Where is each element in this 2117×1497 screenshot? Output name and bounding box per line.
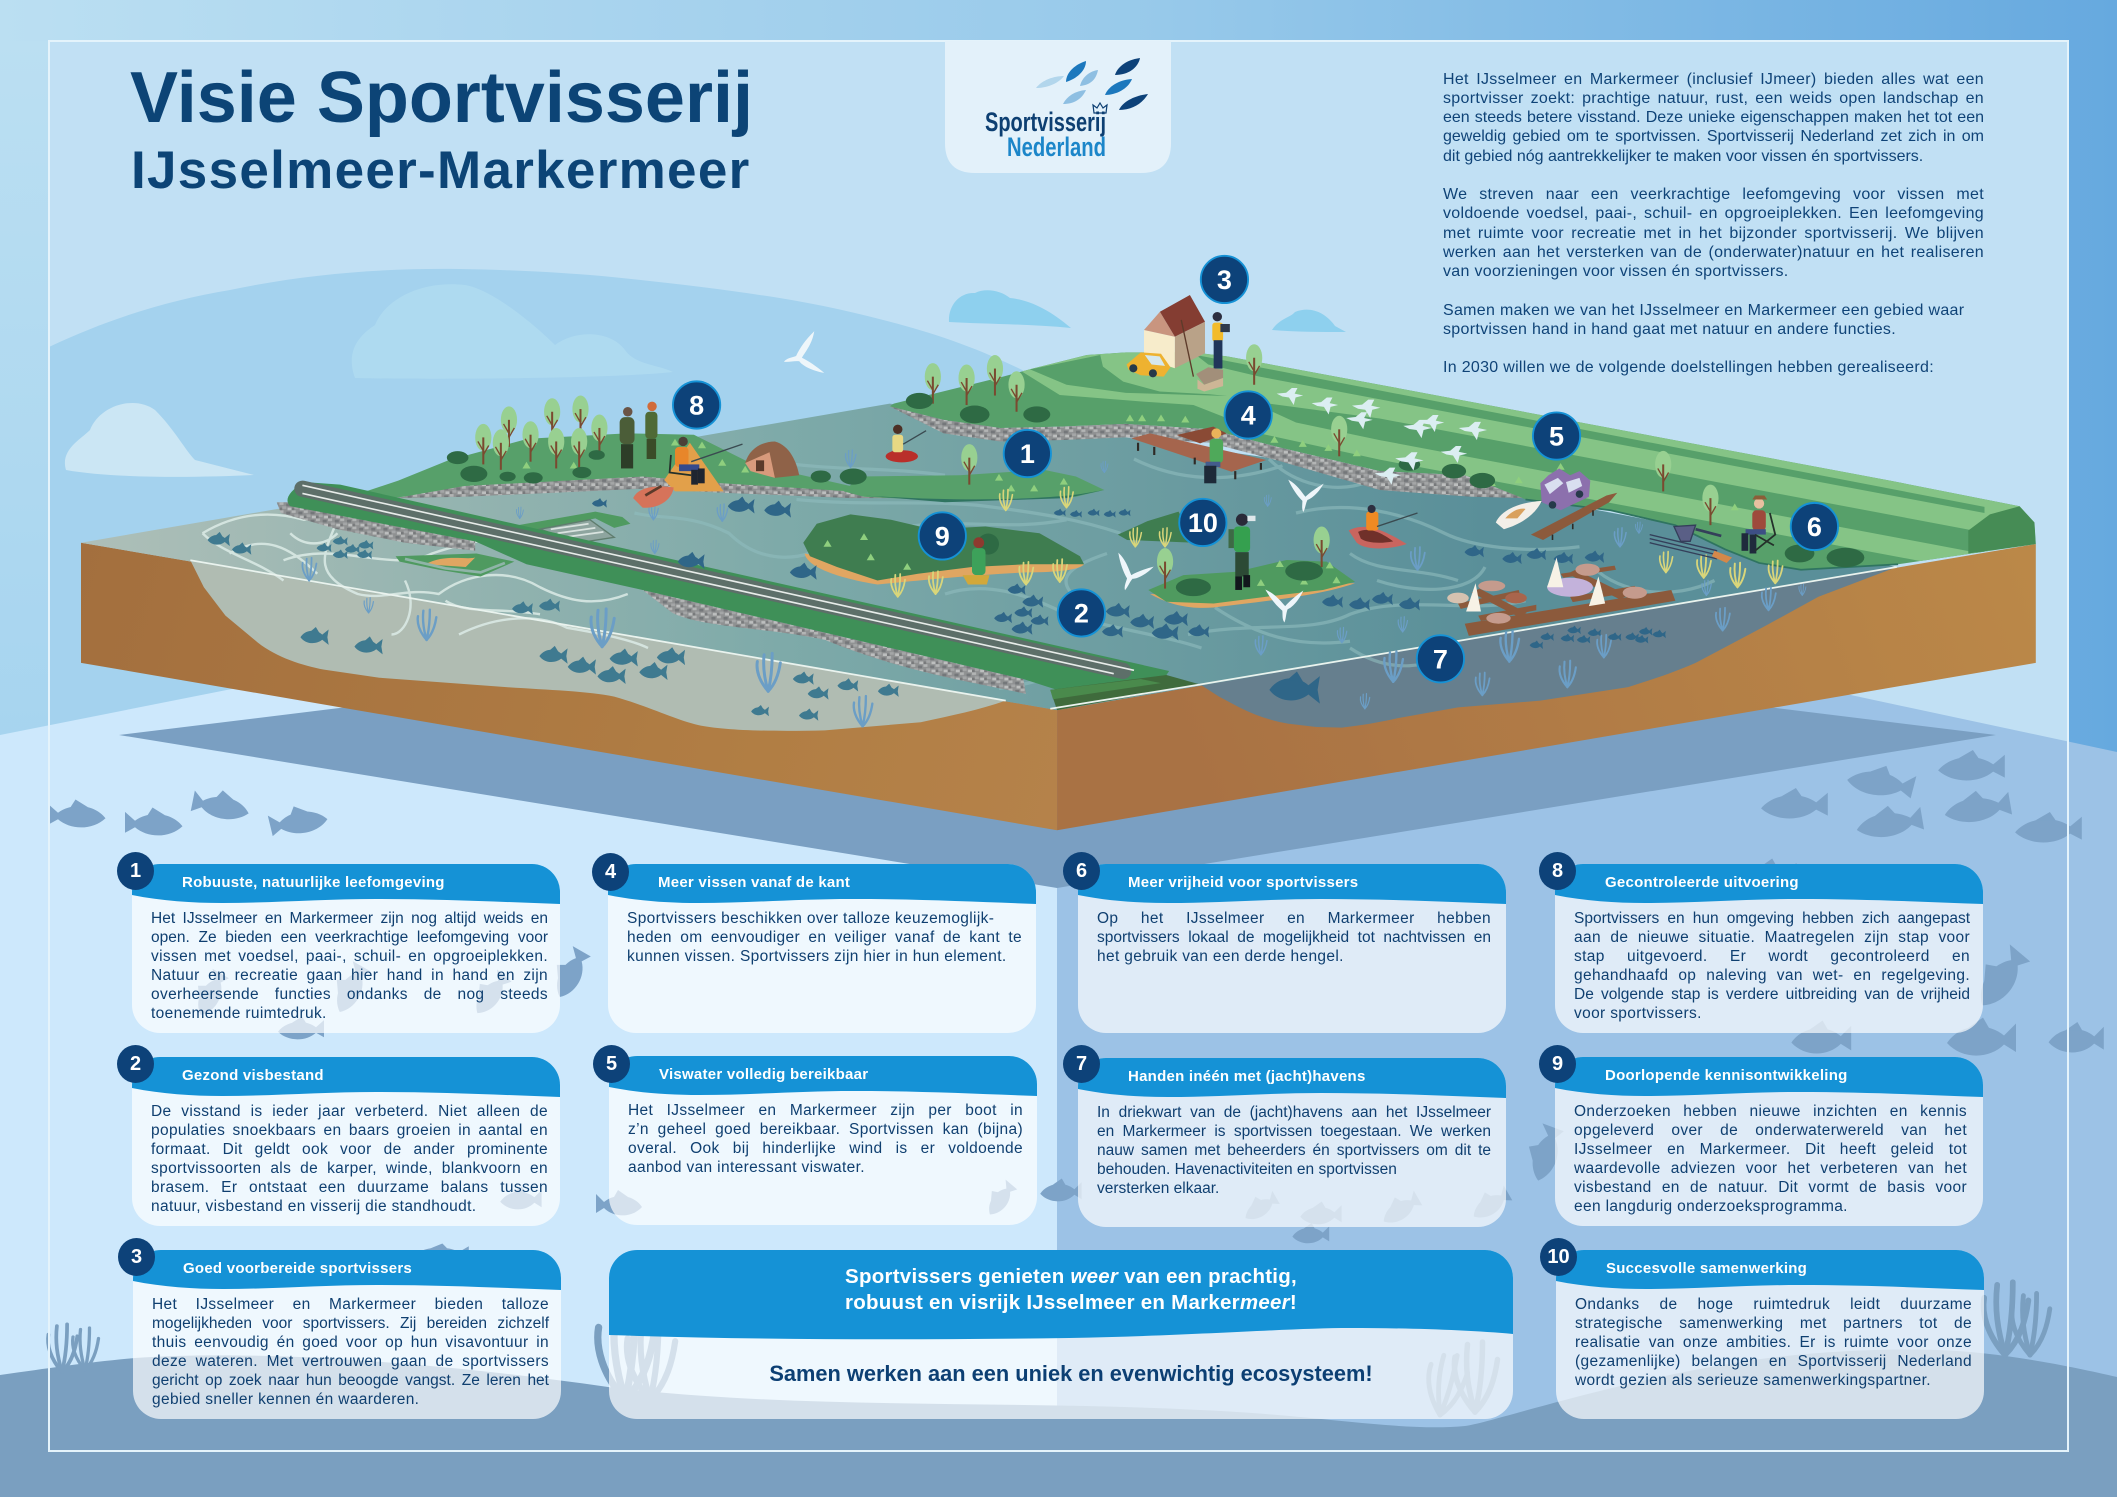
rocks along dike xyxy=(277,502,1026,694)
logo panel: Sportvisserij xyxy=(985,107,1106,137)
seabed hills xyxy=(0,1350,2117,1497)
island back small xyxy=(1118,512,1195,543)
panel: goal 1: open. Ze bieden een veerkrachtige leefomgeving voor xyxy=(151,928,548,946)
panel: goal 9: een langdurig onderzoeksprogramma. xyxy=(1574,1198,1848,1214)
harbour model right of dike xyxy=(518,512,630,543)
land with tent and fishers xyxy=(362,433,919,498)
dike with road xyxy=(287,482,1200,710)
yellow car xyxy=(1127,352,1170,377)
panel: goal 7: versterken elkaar. xyxy=(1097,1180,1219,1196)
harbour model left of dike xyxy=(396,554,514,576)
panel: goal 2 xyxy=(117,1045,560,1226)
panel: goal 1 xyxy=(117,852,560,1033)
fish behind cards xyxy=(186,858,2104,1261)
white boat xyxy=(1496,501,1542,529)
panel: goal 1: Natuur en recreatie gaan hier hand in hand en zijn xyxy=(151,966,548,984)
fish school: lower right xyxy=(1761,750,2082,842)
house with roof xyxy=(1144,295,1205,377)
marker 9 xyxy=(919,512,966,560)
panel: goal 2: sportvissoorten als de karper, winde, blankvoorn en xyxy=(151,1160,548,1176)
intro text: werken aan het versterken van de (onderwater)natuur en het realiseren xyxy=(1443,244,1984,261)
marker 6 xyxy=(1791,503,1838,550)
panel: goal 4: Sportvissers beschikken over talloze keuzemoglijk- xyxy=(627,910,994,926)
panel: goal 1: 1 xyxy=(130,860,141,882)
hut xyxy=(1196,367,1223,392)
panel: goal 6: sportvissers lokaal de mogelijkheid tot nachtvissen en xyxy=(1097,928,1491,946)
marker 4 xyxy=(1225,391,1272,439)
number markers xyxy=(673,256,1838,682)
water cross-section right xyxy=(1200,567,1897,728)
panel: goal 5: Het IJsselmeer en Markermeer zijn per boot in xyxy=(628,1102,1023,1118)
white edge line xyxy=(190,560,1897,709)
panel: goal 6: Meer vrijheid voor sportvissers xyxy=(1128,874,1358,891)
panel: goal 7: behouden. Havenactiviteiten en sportvissen xyxy=(1097,1160,1397,1178)
panel: goal 10: Succesvolle samenwerking xyxy=(1606,1260,1807,1277)
panel: goal 3: 3 xyxy=(131,1246,142,1268)
panel: goal 5: overal. Ook bij hinderlijke wind is er voldoende xyxy=(628,1140,1023,1156)
panel: goal 1: Het IJsselmeer en Markermeer zijn nog altijd weids en xyxy=(151,910,548,926)
reeds xyxy=(891,487,1783,597)
seaweed: bottom xyxy=(48,1282,2050,1418)
water plants xyxy=(302,450,1806,726)
island 10 xyxy=(1148,560,1355,608)
panel: goal 4 xyxy=(592,853,1036,1033)
marina docks with boats xyxy=(1447,558,1675,636)
marker 8: 8 xyxy=(689,390,704,420)
marker 1: 1 xyxy=(1020,439,1035,469)
intro text: sportvisser zoekt: prachtige natuur, rust, een weids open landschap en xyxy=(1443,90,1984,107)
panel: goal 10 xyxy=(1540,1238,1984,1419)
panel: goal 2: De visstand is ieder jaar verbeterd. Niet alleen de xyxy=(151,1102,548,1120)
marker 8 xyxy=(673,381,720,429)
panel: goal 7: Handen inéén met (jacht)havens xyxy=(1128,1068,1366,1085)
panel: goal 5: aanbod van interessant viswater. xyxy=(628,1158,865,1176)
far hill land xyxy=(890,352,2036,570)
panel: goal 3: Goed voorbereide sportvissers xyxy=(183,1260,412,1277)
panel: goal 7: en Markermeer is sportvissen toegestaan. We werken xyxy=(1097,1122,1491,1140)
panel: goal 4: heden om eenvoudiger en veiliger vanaf de kant te xyxy=(627,928,1022,946)
water veins left of dike xyxy=(202,515,648,648)
panel: goal 8: Gecontroleerde uitvoering xyxy=(1605,874,1799,891)
rowing fisher xyxy=(1349,505,1418,548)
panel: goal 3: gebied sneller kennen én waarderen. xyxy=(152,1390,419,1408)
shore dark line xyxy=(1526,500,1898,570)
panel: goal 6: het gebruik van een derde hengel. xyxy=(1097,948,1344,964)
fish in water xyxy=(208,532,899,721)
intro text: sportvissen hand in hand gaat met natuur en andere functies. xyxy=(1443,321,1896,338)
subtitle: IJsselmeer-Markermeer xyxy=(131,141,751,200)
tent xyxy=(745,441,799,478)
water veins xyxy=(634,459,1714,688)
red boat xyxy=(633,486,674,508)
island 9 xyxy=(803,514,1084,585)
logo panel xyxy=(945,41,1171,173)
panel: goal 7: nauw samen met beheerders én sportvissers om dit te xyxy=(1097,1142,1491,1158)
birdwatcher xyxy=(1228,514,1256,590)
earth front left xyxy=(81,543,1057,830)
grass tufts xyxy=(522,414,1739,510)
person seated with red raft xyxy=(886,425,926,462)
logo panel: Nederland xyxy=(1007,132,1106,162)
fish school: lower left xyxy=(48,786,330,839)
panel: goal 1: overheersende functies ondanks de nog steeds xyxy=(151,986,548,1002)
panel: goal 6: Op het IJsselmeer en Markermeer hebben xyxy=(1097,910,1491,926)
3D landscape block xyxy=(81,256,2036,830)
panel: goal 6 xyxy=(1063,852,1506,1033)
marker 7: 7 xyxy=(1433,644,1448,674)
panel: goal 5 xyxy=(593,1045,1037,1225)
water surface xyxy=(81,404,1897,710)
marker 9: 9 xyxy=(935,521,950,551)
two standing men xyxy=(620,402,657,468)
panel: goal 10: Ondanks de hoge ruimtedruk leidt duurzame xyxy=(1575,1296,1972,1312)
panel: goal 2: formaat. Dit geldt ook voor de ander prominente xyxy=(151,1140,548,1158)
intro text: In 2030 willen we de volgende doelstellingen hebben gerealiseerd: xyxy=(1443,359,1934,376)
intro text: met ruimte voor recreatie met in het bijzonder sportvisserij. We blijven xyxy=(1443,224,1984,242)
conclusion headline: robuust en visrijk IJsselmeer en Markermeer! xyxy=(845,1291,1297,1314)
dock 5 xyxy=(1531,493,1617,540)
panel: goal 2: 2 xyxy=(130,1053,141,1075)
land stripes xyxy=(1006,352,2036,563)
logo leaves xyxy=(1036,58,1148,110)
intro text: Samen maken we van het IJsselmeer en Markermeer een gebied waar xyxy=(1443,302,1964,318)
panel: goal 3: gericht op zoek naar hun beoogde vangst. Ze leren het xyxy=(152,1372,549,1388)
birds xyxy=(778,331,1324,624)
marker 2: 2 xyxy=(1074,598,1089,628)
panel: goal 8: Sportvissers en hun omgeving hebben zich aangepast xyxy=(1574,910,1970,926)
panel: goal 8: aan de nieuwe situatie. Maatregelen zijn stap voor xyxy=(1574,928,1970,946)
angler in chair with sand xyxy=(664,437,742,491)
panel: goal 9: Onderzoeken hebben nieuwe inzichten en kennis xyxy=(1574,1102,1967,1120)
intro text: Het IJsselmeer en Markermeer (inclusief IJmeer) bieden alles wat een xyxy=(1443,70,1984,88)
marker 10 xyxy=(1179,499,1226,546)
marker 10: 10 xyxy=(1188,508,1218,538)
panel: goal 9: 9 xyxy=(1552,1053,1563,1075)
panel: goal 4: Meer vissen vanaf de kant xyxy=(658,874,850,891)
panel: goal 6: 6 xyxy=(1076,860,1087,882)
marker 3 xyxy=(1201,256,1248,303)
earth front right xyxy=(1057,544,2036,830)
panel: goal 3: deze wateren. Met vertrouwen gaan de sportvissers xyxy=(152,1352,549,1370)
panel: goal 3: Het IJsselmeer en Markermeer bieden talloze xyxy=(152,1296,549,1312)
bushes xyxy=(447,393,1864,596)
panel: goal 9: waardevolle adviezen voor het verbeteren van het xyxy=(1574,1160,1967,1176)
flock of geese xyxy=(1277,388,1487,485)
intro text: van voorzieningen voor vissen én sportvissers. xyxy=(1443,263,1789,280)
conclusion headline: Sportvissers genieten weer van een prachtig, xyxy=(845,1265,1297,1288)
panel: goal 2: natuur, visbestand en visserij die standhoudt. xyxy=(151,1198,476,1214)
person with yellow shirt xyxy=(1212,312,1230,369)
intro text: We streven naar een veerkrachtige leefomgeving voor vissen met xyxy=(1443,186,1984,203)
marker 5: 5 xyxy=(1549,421,1564,451)
panel: goal 2: Gezond visbestand xyxy=(182,1067,324,1084)
marker 3: 3 xyxy=(1217,265,1232,295)
panel: goal 9: opgeleverd over de onderwaterwereld van het xyxy=(1574,1122,1967,1138)
marker 5 xyxy=(1533,412,1580,460)
dock 4 with angler xyxy=(1131,427,1266,483)
panel: goal 4: 4 xyxy=(605,861,616,883)
panel: goal 1: toenemende ruimtedruk. xyxy=(151,1004,327,1022)
person seated on island 9 xyxy=(963,537,990,585)
panel: goal 1: Robuuste, natuurlijke leefomgeving xyxy=(182,874,445,891)
panel: goal 8: gehandhaafd op naleving van wet- en regelgeving. xyxy=(1574,966,1970,984)
intro text: dit gebied nóg aantrekkelijker te maken voor vissen én sportvissers. xyxy=(1443,148,1923,164)
panel: goal 10: strategische samenwerking met partners tot de xyxy=(1575,1314,1972,1332)
panel: goal 3: mogelijkheden voor sportvissers. Zij bereiden zichzelf xyxy=(152,1314,549,1332)
landing net and rods xyxy=(1650,525,1732,563)
conclusion statement: Samen werken aan een uniek en evenwichtig ecosysteem! xyxy=(769,1361,1373,1386)
panel: goal 9: visbestand en de natuur. Dit vormt de basis voor xyxy=(1574,1178,1967,1196)
panel: goal 4: kunnen vissen. Sportvissers zijn hier in hun element. xyxy=(627,948,1007,964)
marker 2 xyxy=(1058,589,1105,637)
intro text: geweldig gebied om te sportvissen. Sportvisserij Nederland zet zich in om xyxy=(1443,128,1984,145)
title: Visie Sportvisserij xyxy=(130,58,753,138)
panel: goal 9: IJsselmeer en Markermeer. Dit heeft geleid tot xyxy=(1574,1140,1967,1158)
panel: goal 8: voor sportvissers. xyxy=(1574,1004,1702,1022)
clouds xyxy=(65,284,1346,477)
intro text: voldoende voedsel, paai-, schuil- en opgroeiplekken. Een leefomgeving xyxy=(1443,205,1984,222)
panel: goal 10: 10 xyxy=(1547,1246,1570,1268)
purple car xyxy=(1540,468,1590,510)
shadow under block xyxy=(119,620,1996,888)
panel: goal 9: Doorlopende kennisontwikkeling xyxy=(1605,1067,1848,1084)
panel: goal 2: brasem. Er ontstaat een duurzame balans tussen xyxy=(151,1178,548,1196)
panel: goal 8 xyxy=(1539,852,1983,1033)
trees xyxy=(475,344,1719,589)
panel: conclusion xyxy=(609,1250,1513,1419)
marker 1 xyxy=(1004,430,1051,477)
panel: goal 8: De volgende stap is verdere uitbreiding van de vrijheid xyxy=(1574,986,1970,1002)
intro text xyxy=(1443,70,1984,376)
panel: goal 3: thuis eenvoudig én goed voor op hun visavontuur in xyxy=(152,1334,549,1350)
panel: goal 1: vissen met voedsel, paai-, schuil- en opgroeiplekken. xyxy=(151,948,548,964)
panel: goal 7: In driekwart van de (jacht)havens aan het IJsselmeer xyxy=(1097,1104,1491,1120)
panel: goal 5: z’n geheel goed bereikbaar. Sportvissen kan (bijna) xyxy=(628,1120,1023,1138)
intro text: een steeds betere visstand. Deze unieke eigenschappen maken het tot een xyxy=(1443,109,1984,126)
panel: goal 8: stap uitgevoerd. Er wordt gecontroleerd en xyxy=(1574,948,1970,964)
panel: goal 10: realisatie van onze ambities. Er is ruimte voor onze xyxy=(1575,1334,1972,1350)
panel: goal 10: (gezamenlijke) belangen en Sportvisserij Nederland xyxy=(1575,1352,1972,1370)
panel: goal 7: 7 xyxy=(1076,1053,1087,1075)
rocks on far shore xyxy=(890,406,1523,498)
panel: goal 3 xyxy=(118,1238,561,1419)
panel: goal 8: 8 xyxy=(1552,860,1563,882)
man on chair xyxy=(1742,495,1775,554)
island 1 xyxy=(844,470,1104,502)
marker 7 xyxy=(1417,635,1464,682)
panel: goal 9 xyxy=(1539,1045,1983,1226)
water cross-section left xyxy=(190,560,1006,731)
marker 6: 6 xyxy=(1807,512,1822,542)
marker 4: 4 xyxy=(1241,400,1256,430)
panel: goal 10: wordt gezien als serieuze samenwerkingspartner. xyxy=(1575,1372,1931,1388)
panel: goal 7 xyxy=(1063,1045,1506,1227)
fish schools in lake xyxy=(592,497,1666,704)
panel: goal 5: Viswater volledig bereikbaar xyxy=(659,1066,868,1083)
conclusion headline xyxy=(845,1265,1297,1314)
rocks on back shore xyxy=(396,477,911,498)
panel: goal 5: 5 xyxy=(606,1053,617,1075)
panel: goal 2: populaties snoekbaars en baars groeien in aantal en xyxy=(151,1122,548,1138)
